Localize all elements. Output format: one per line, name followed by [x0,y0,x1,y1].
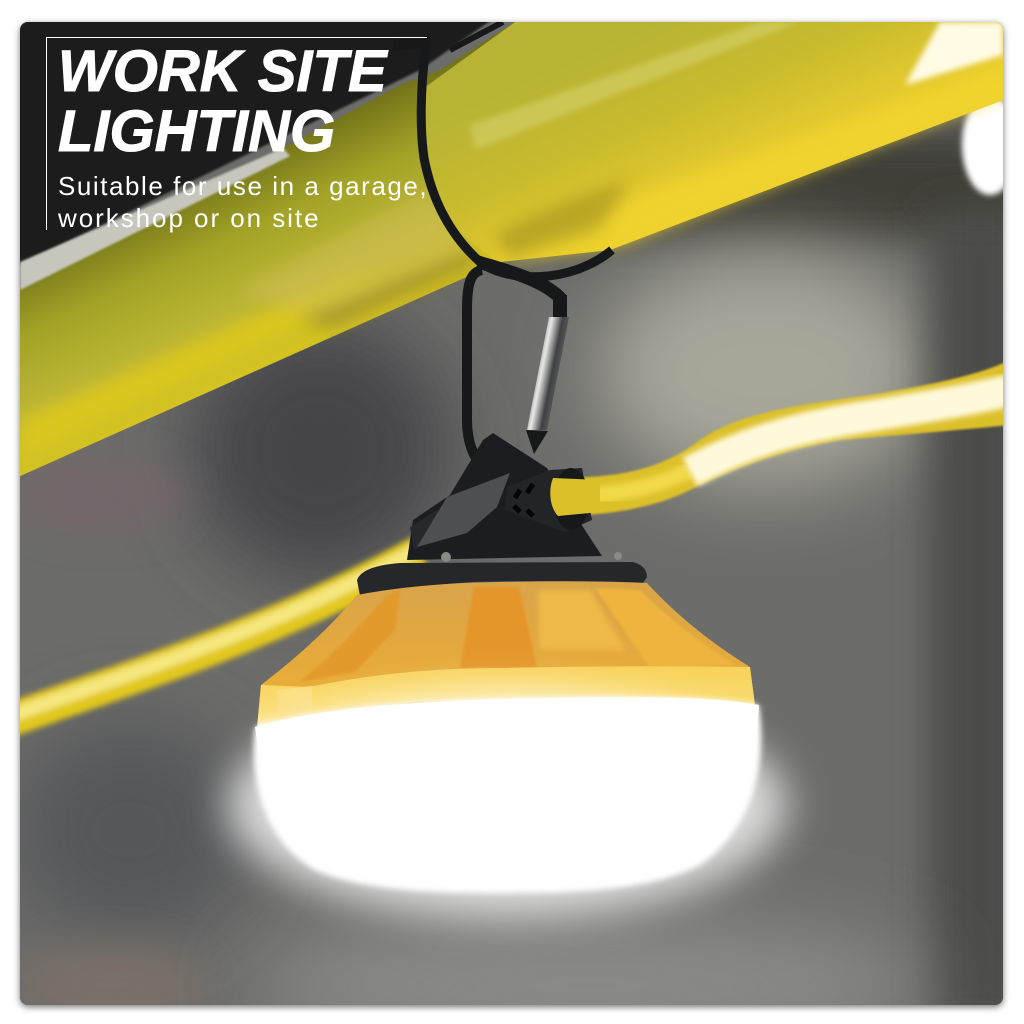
lower yellow cable [10,548,420,720]
right yellow cable [553,360,1010,516]
subtitle: workshop or on site [58,203,320,233]
dark top-left corner [0,0,520,275]
lamp mount [357,433,647,596]
cable tie [393,22,612,300]
subtitle [58,171,428,233]
yellow pipe [0,22,1024,485]
title frame line [46,37,427,230]
title: WORK SITE [58,39,387,104]
title [58,39,389,164]
carabiner [467,270,569,470]
glowing diffuser [227,693,787,917]
title: LIGHTING [58,99,335,164]
lamp shell [257,581,755,728]
subtitle: Suitable for use in a garage, [58,171,428,201]
